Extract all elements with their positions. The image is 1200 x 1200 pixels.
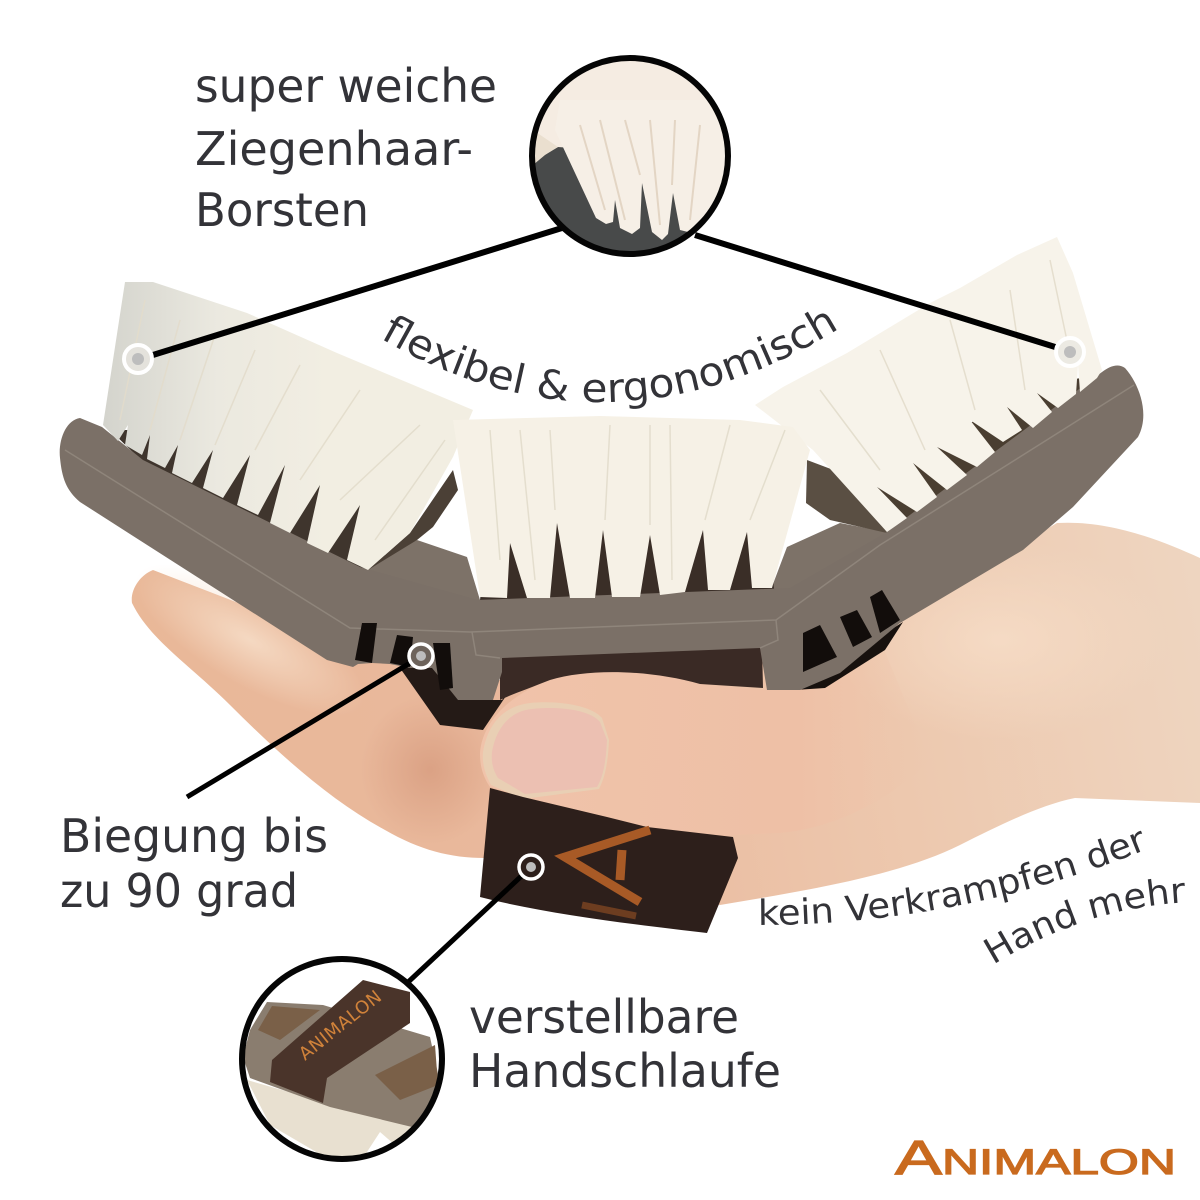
hand (115, 523, 1200, 905)
heading: goat hair bristles: Borsten (195, 183, 369, 237)
inset circle: hand strap (240, 958, 445, 1163)
inset circle: hand strap: ANIMALON (295, 986, 386, 1065)
text: bend up to 90 degrees (60, 809, 328, 918)
callout dot: bend (409, 644, 433, 668)
lower strap (480, 788, 738, 933)
dark gaps behind bristles (110, 375, 1100, 600)
text: bend up to 90 degrees: Biegung bis (60, 809, 328, 863)
right bristles (755, 237, 1102, 532)
heading: goat hair bristles (195, 59, 497, 237)
curved text: no hand cramping: Hand mehr (983, 878, 1185, 963)
bristle shading (120, 260, 1070, 580)
brush notches (355, 590, 900, 690)
text: adjustable hand strap (469, 990, 781, 1098)
callout dot: left bristles (124, 345, 152, 373)
thumb nail (483, 702, 609, 799)
brush inner base (360, 523, 887, 610)
callout line: strap (405, 868, 530, 985)
brush rim highlights (65, 385, 1134, 658)
strap logo letter A (565, 830, 650, 902)
brush body (60, 365, 1143, 700)
heading: goat hair bristles: super weiche (195, 59, 497, 113)
callout line: bristles right (695, 235, 1068, 351)
center bristles (453, 416, 810, 598)
strap under brush (500, 646, 763, 700)
strap logo second mark (582, 905, 636, 916)
callout line: bristles left (140, 228, 562, 359)
heading: goat hair bristles: Ziegenhaar- (195, 122, 473, 176)
callout dot: right bristles (1056, 338, 1084, 366)
text: adjustable hand strap: verstellbare (469, 990, 739, 1044)
logo: Animalon: A NIMALON (895, 1132, 1176, 1185)
shadow under brush (400, 648, 510, 730)
text: bend up to 90 degrees: zu 90 grad (60, 864, 298, 918)
callout dot: strap (519, 855, 543, 879)
curved text: no hand cramping (761, 830, 1185, 963)
inset circle: goat hair bristles (530, 55, 730, 260)
left bristles (103, 282, 473, 570)
shadow under right brush end (795, 622, 903, 690)
curved text: no hand cramping: kein Verkrampfen der (761, 830, 1142, 925)
thumb (480, 640, 930, 837)
callout line: bend (187, 657, 420, 797)
text: adjustable hand strap: Handschlaufe (469, 1044, 781, 1098)
curved text: flexible and ergonomic: flexibel & ergonomisch (384, 312, 837, 409)
